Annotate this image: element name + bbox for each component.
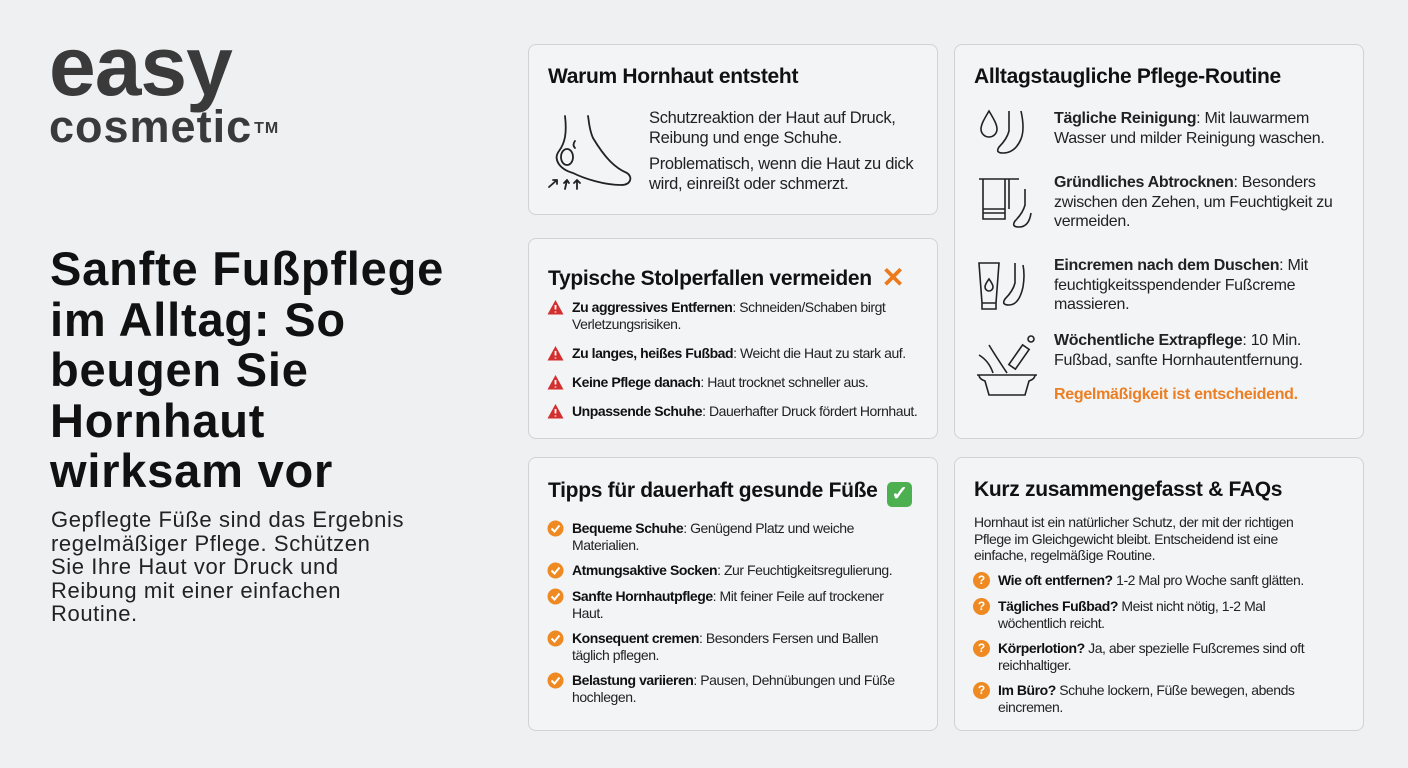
FAQ list: ?	[978, 573, 985, 587]
FAQ list: Wie oft entfernen? 1-2 Mal pro Woche sanft glätten.	[998, 572, 1304, 588]
title	[50, 242, 444, 497]
heading: Tipps für dauerhaft gesunde Füße	[548, 479, 878, 502]
list: Unpassende Schuhe: Dauerhafter Druck fördert Hornhaut.	[572, 403, 917, 419]
icon: drop and foot	[980, 110, 1024, 154]
FAQ list: Körperlotion? Ja, aber spezielle Fußcremes sind oft	[998, 640, 1304, 656]
list: Haut.	[572, 605, 603, 621]
callout: Regelmäßigkeit ist entscheidend.	[1054, 386, 1298, 403]
FAQ list: Tägliches Fußbad? Meist nicht nötig, 1-2 Mal	[998, 598, 1265, 614]
title: wirksam vor	[50, 444, 333, 497]
list: Atmungsaktive Socken: Zur Feuchtigkeitsregulierung.	[572, 562, 892, 578]
FAQ list: ?	[978, 683, 985, 697]
text: Wöchentliche Extrapflege: 10 Min. Fußbad, sanfte Hornhautentfernung.	[1054, 332, 1303, 368]
summary: einfache, regelmäßige Routine.	[974, 547, 1155, 563]
title: im Alltag: So	[50, 292, 346, 346]
subtitle: Gepflegte Füße sind das Ergebnis	[51, 507, 404, 532]
panel: Warum Hornhaut entsteht	[528, 44, 938, 215]
title: Sanfte Fußpflege	[50, 242, 444, 295]
FAQ list: eincremen.	[998, 699, 1063, 715]
icon: towel and foot	[979, 178, 1032, 228]
list: Zu aggressives Entfernen: Schneiden/Schaben birgt	[572, 299, 885, 315]
logo: cosmeticTM	[49, 101, 279, 152]
subtitle	[51, 507, 404, 626]
list	[548, 299, 917, 419]
subtitle: Sie Ihre Haut vor Druck und	[51, 554, 339, 579]
panel: Pflege-Routine	[954, 44, 1364, 439]
title: beugen Sie	[50, 343, 309, 396]
list: Konsequent cremen: Besonders Fersen und Ballen	[572, 630, 878, 646]
heading: Alltagstaugliche Pflege-Routine	[974, 65, 1281, 88]
list	[548, 520, 895, 705]
list: Verletzungsrisiken.	[572, 316, 681, 332]
icon: foot bath with file	[977, 335, 1037, 396]
summary: Hornhaut ist ein natürlicher Schutz, der mit der richtigen	[974, 514, 1293, 530]
list: Sanfte Hornhautpflege: Mit feiner Feile auf trockener	[572, 588, 883, 604]
heading: Warum Hornhaut entsteht	[548, 65, 798, 88]
text: Problematisch, wenn die Haut zu dick wird, einreißt oder schmerzt.	[649, 155, 913, 193]
heading: Typische Stolperfallen vermeiden ✕	[548, 262, 904, 293]
list: Keine Pflege danach: Haut trocknet schneller aus.	[572, 374, 868, 390]
FAQ list: ?	[978, 599, 985, 613]
subtitle: regelmäßiger Pflege. Schützen	[51, 530, 370, 556]
text: Eincremen nach dem Duschen: Mit feuchtigkeitsspendender Fußcreme massieren.	[1054, 257, 1308, 313]
heading: Kurz zusammengefasst & FAQs	[974, 478, 1282, 501]
list: Belastung variieren: Pausen, Dehnübungen und Füße	[572, 672, 895, 688]
summary	[974, 514, 1293, 563]
list: hochlegen.	[572, 689, 636, 705]
list: Bequeme Schuhe: Genügend Platz und weiche	[572, 520, 854, 536]
summary: Pflege im Gleichgewicht bleibt. Entscheidend ist eine	[974, 530, 1278, 546]
panel: FAQs	[954, 457, 1364, 731]
subtitle: Reibung mit einer einfachen	[51, 578, 341, 602]
FAQ list: ?	[978, 641, 985, 655]
FAQ list: reichhaltiger.	[998, 657, 1071, 673]
list: Materialien.	[572, 537, 639, 553]
panel: Tipps	[528, 457, 938, 731]
text: Tägliche Reinigung: Mit lauwarmem Wasser und milder Reinigung waschen.	[1054, 110, 1325, 146]
panel: Stolperfallen	[528, 238, 938, 439]
FAQ list: wöchentlich reicht.	[998, 615, 1105, 631]
logo	[49, 19, 279, 152]
logo: easy	[49, 19, 232, 113]
icon: cream tube and foot	[978, 262, 1025, 310]
subtitle: Routine.	[51, 601, 138, 626]
list: täglich pflegen.	[572, 647, 659, 663]
FAQ list	[973, 572, 1305, 715]
icon: foot with pressure	[548, 115, 632, 190]
list: Zu langes, heißes Fußbad: Weicht die Haut zu stark auf.	[572, 345, 906, 361]
text: Schutzreaktion der Haut auf Druck, Reibung und enge Schuhe.	[649, 109, 896, 147]
FAQ list: Im Büro? Schuhe lockern, Füße bewegen, abends	[998, 682, 1294, 698]
heading: ✓	[891, 483, 908, 505]
title: Hornhaut	[50, 394, 265, 446]
text	[649, 109, 914, 193]
text: Gründliches Abtrocknen: Besonders zwischen den Zehen, um Feuchtigkeit zu vermeiden.	[1054, 174, 1333, 230]
